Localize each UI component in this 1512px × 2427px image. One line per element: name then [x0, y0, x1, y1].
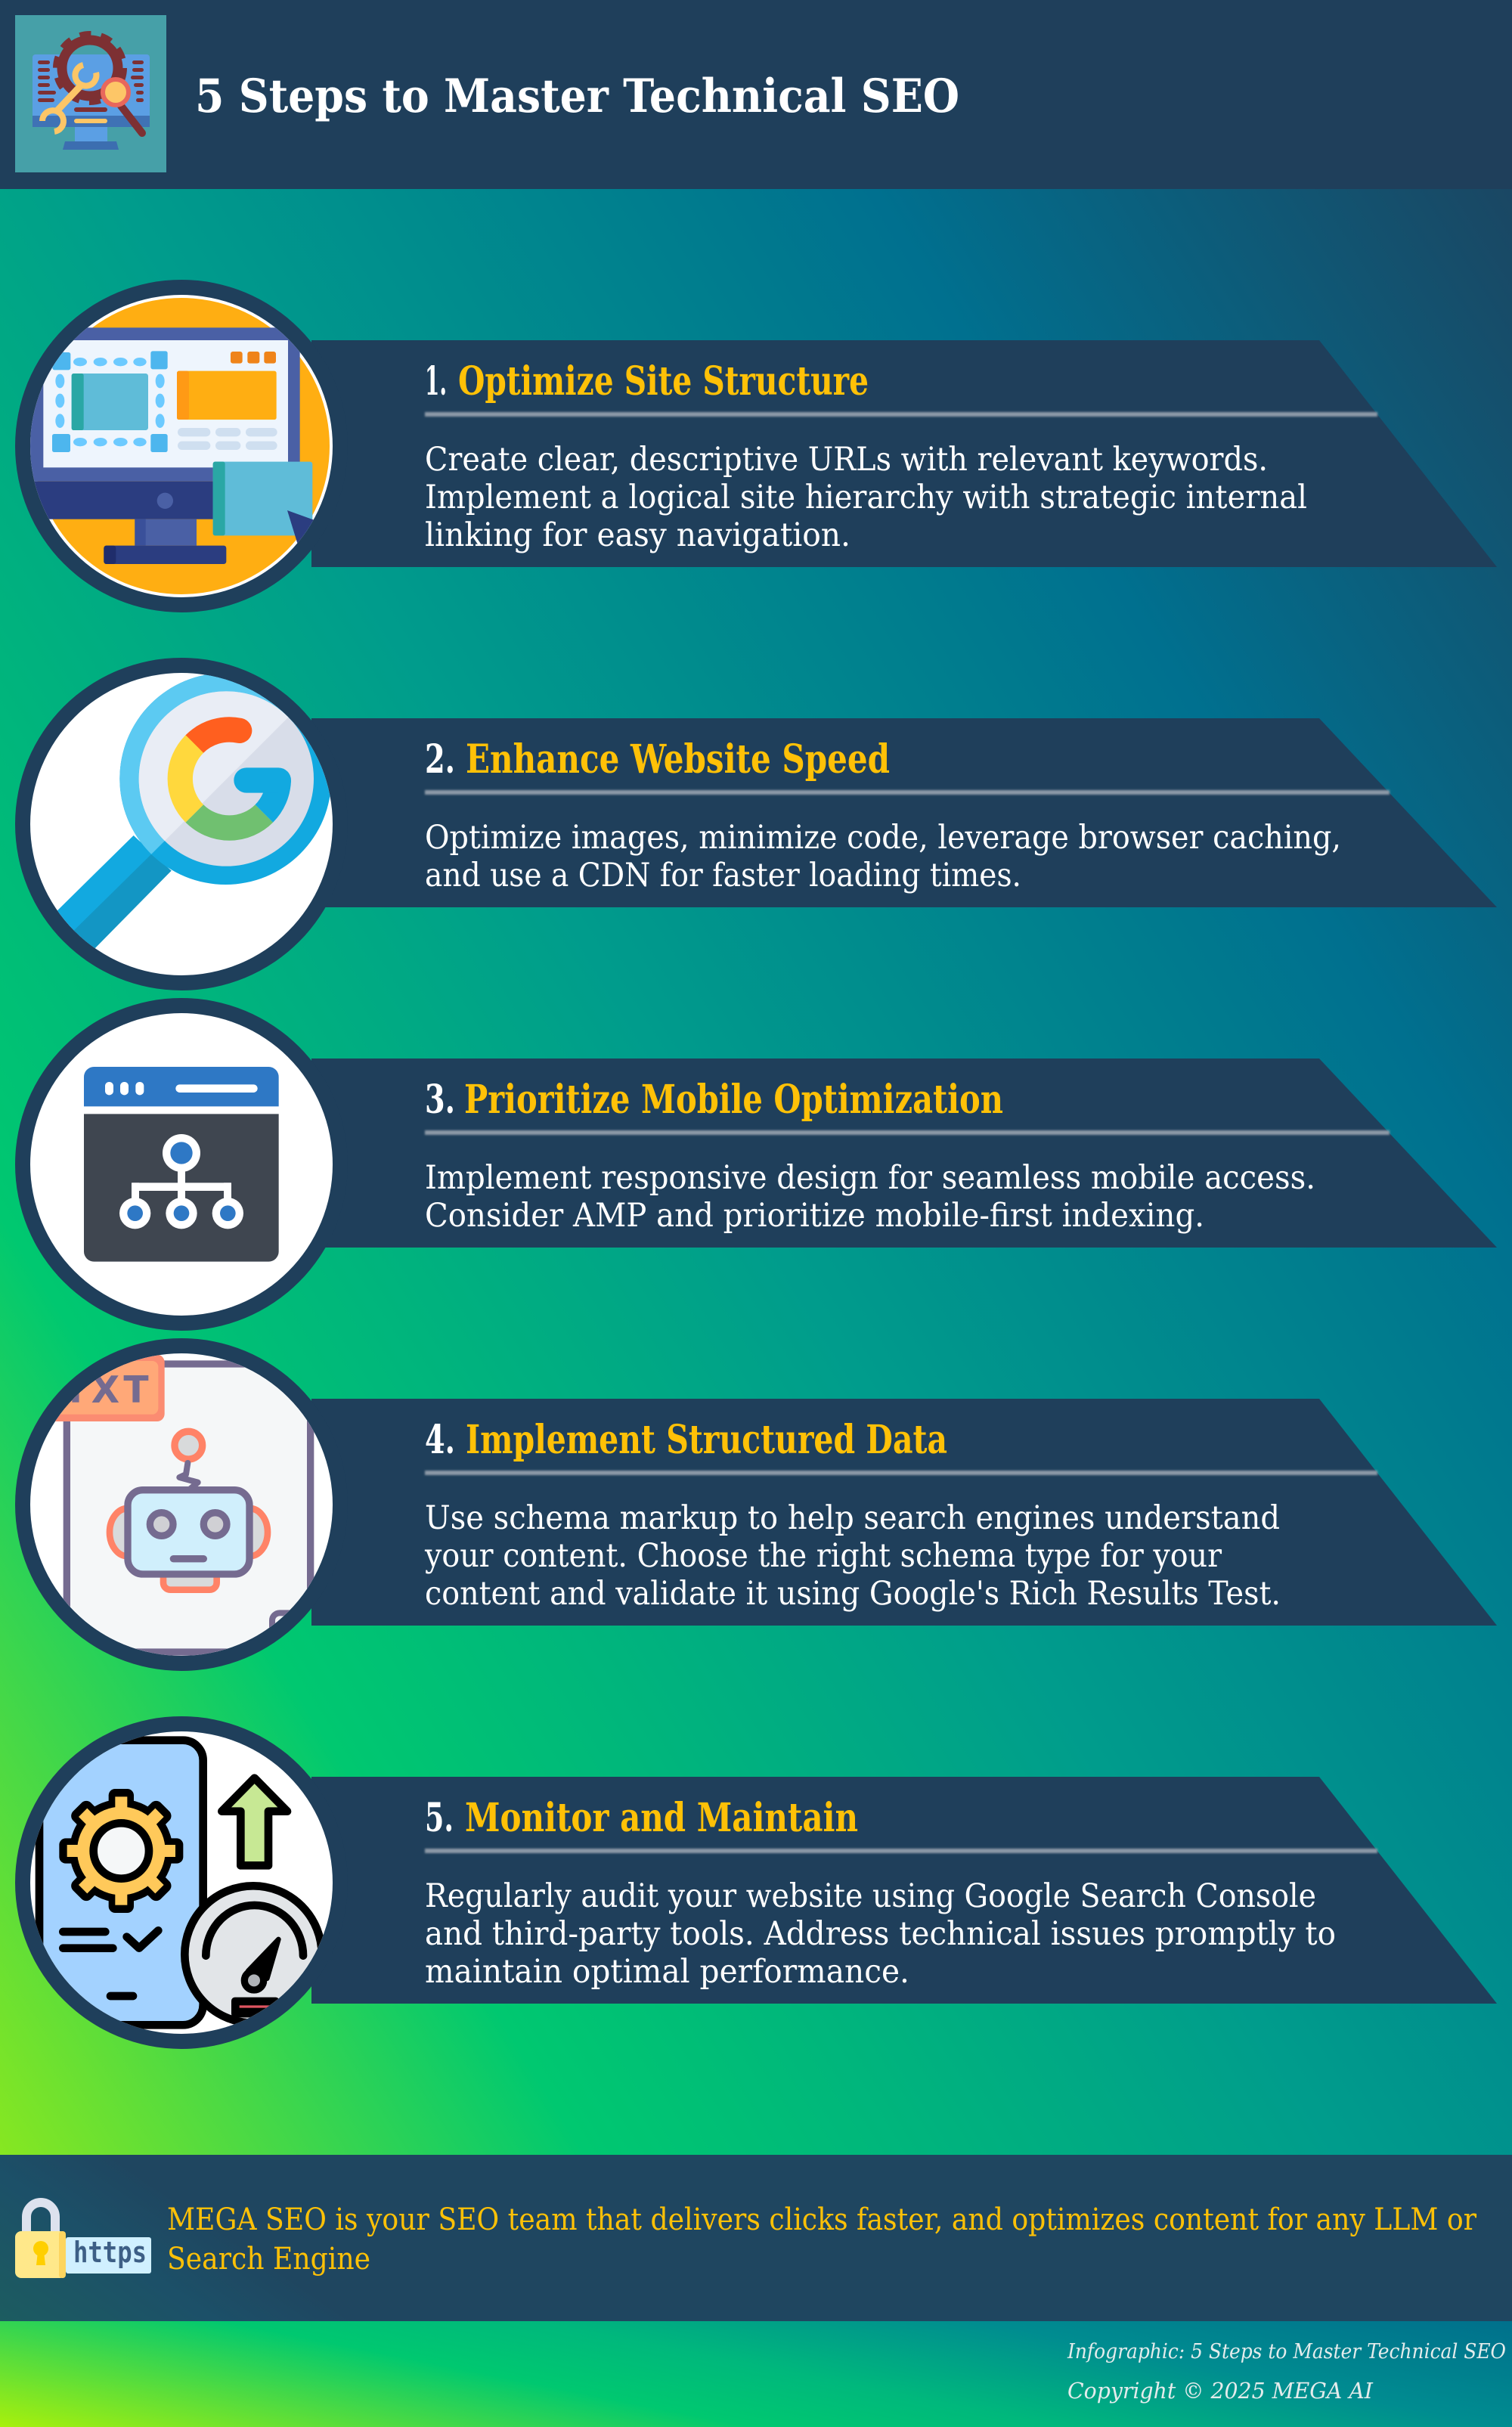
body text: step 4	[424, 1499, 1281, 1613]
body text: step 4: your content. Choose the right schema type for your	[424, 1537, 1222, 1575]
body text: step 3: Implement responsive design for seamless mobile access.	[425, 1159, 1315, 1197]
banner shape	[311, 1059, 1497, 1248]
heading: step 1: 1.	[425, 358, 447, 404]
body text: step 5: maintain optimal performance.	[425, 1953, 909, 1991]
body text: step 5: and third-party tools. Address technical issues promptly to	[425, 1915, 1336, 1953]
call-to-action text: Search Engine	[167, 2242, 370, 2277]
body text: step 2: and use a CDN for faster loading times.	[425, 857, 1021, 894]
body text: step 4: content and validate it using Google's Rich Results Test.	[425, 1575, 1281, 1613]
body text: step 2	[425, 819, 1341, 894]
footer	[0, 2321, 1512, 2427]
body text: step 1: linking for easy navigation.	[425, 516, 850, 554]
icon: https padlock	[15, 2202, 151, 2278]
heading: step 2: Enhance Website Speed	[466, 736, 890, 783]
panel: step 4	[15, 1338, 1497, 1671]
icon: robots txt file: TXT	[63, 1369, 149, 1412]
icon: site hierarchy window	[15, 998, 348, 1331]
footer credit text: Copyright © 2025 MEGA AI	[1067, 2378, 1374, 2404]
heading: step 5: Monitor and Maintain	[465, 1795, 858, 1841]
body text: step 1: Create clear, descriptive URLs with relevant keywords.	[425, 441, 1268, 479]
call-to-action text	[167, 2202, 1477, 2277]
icon: google magnifying glass	[15, 658, 348, 990]
body text: step 3	[425, 1159, 1315, 1235]
banner shape	[311, 718, 1497, 907]
body text: step 5	[425, 1877, 1336, 1991]
banner shape	[311, 1399, 1497, 1626]
header bar	[0, 0, 1512, 189]
icon: phone gear and speed gauge	[15, 1716, 348, 2049]
banner shape	[311, 340, 1497, 567]
panel: step 1	[15, 280, 1497, 612]
banner shape	[311, 1777, 1497, 2004]
heading: step 2: 2.	[425, 736, 455, 783]
body text: step 3: Consider AMP and prioritize mobile-first indexing.	[425, 1197, 1204, 1235]
panel: step 5	[15, 1716, 1497, 2049]
heading: step 4: 4.	[425, 1417, 455, 1463]
panel: step 3	[15, 998, 1497, 1331]
title: 5 Steps to Master Technical SEO	[195, 70, 959, 123]
body text: step 1: Implement a logical site hierarchy with strategic internal	[425, 479, 1307, 516]
heading: step 3: 3.	[425, 1077, 455, 1123]
heading: step 3: Prioritize Mobile Optimization	[464, 1077, 1003, 1123]
icon: robots txt file	[15, 1338, 348, 1671]
icon: technical SEO logo	[15, 15, 166, 172]
heading: step 1: Optimize Site Structure	[458, 358, 869, 404]
footer credit text	[1067, 2340, 1506, 2404]
panel: step 2	[15, 658, 1497, 990]
body text: step 5: Regularly audit your website using Google Search Console	[425, 1877, 1316, 1915]
heading: step 4: Implement Structured Data	[466, 1417, 947, 1463]
icon: website monitor layout	[15, 280, 348, 612]
heading: step 5: 5.	[425, 1795, 454, 1841]
call-to-action band	[0, 2155, 1512, 2321]
body text: step 2: Optimize images, minimize code, leverage browser caching,	[425, 819, 1341, 857]
body text: step 4: Use schema markup to help search engines understand	[425, 1499, 1280, 1537]
body text: step 1	[425, 441, 1307, 554]
icon: https padlock: https	[73, 2236, 147, 2269]
